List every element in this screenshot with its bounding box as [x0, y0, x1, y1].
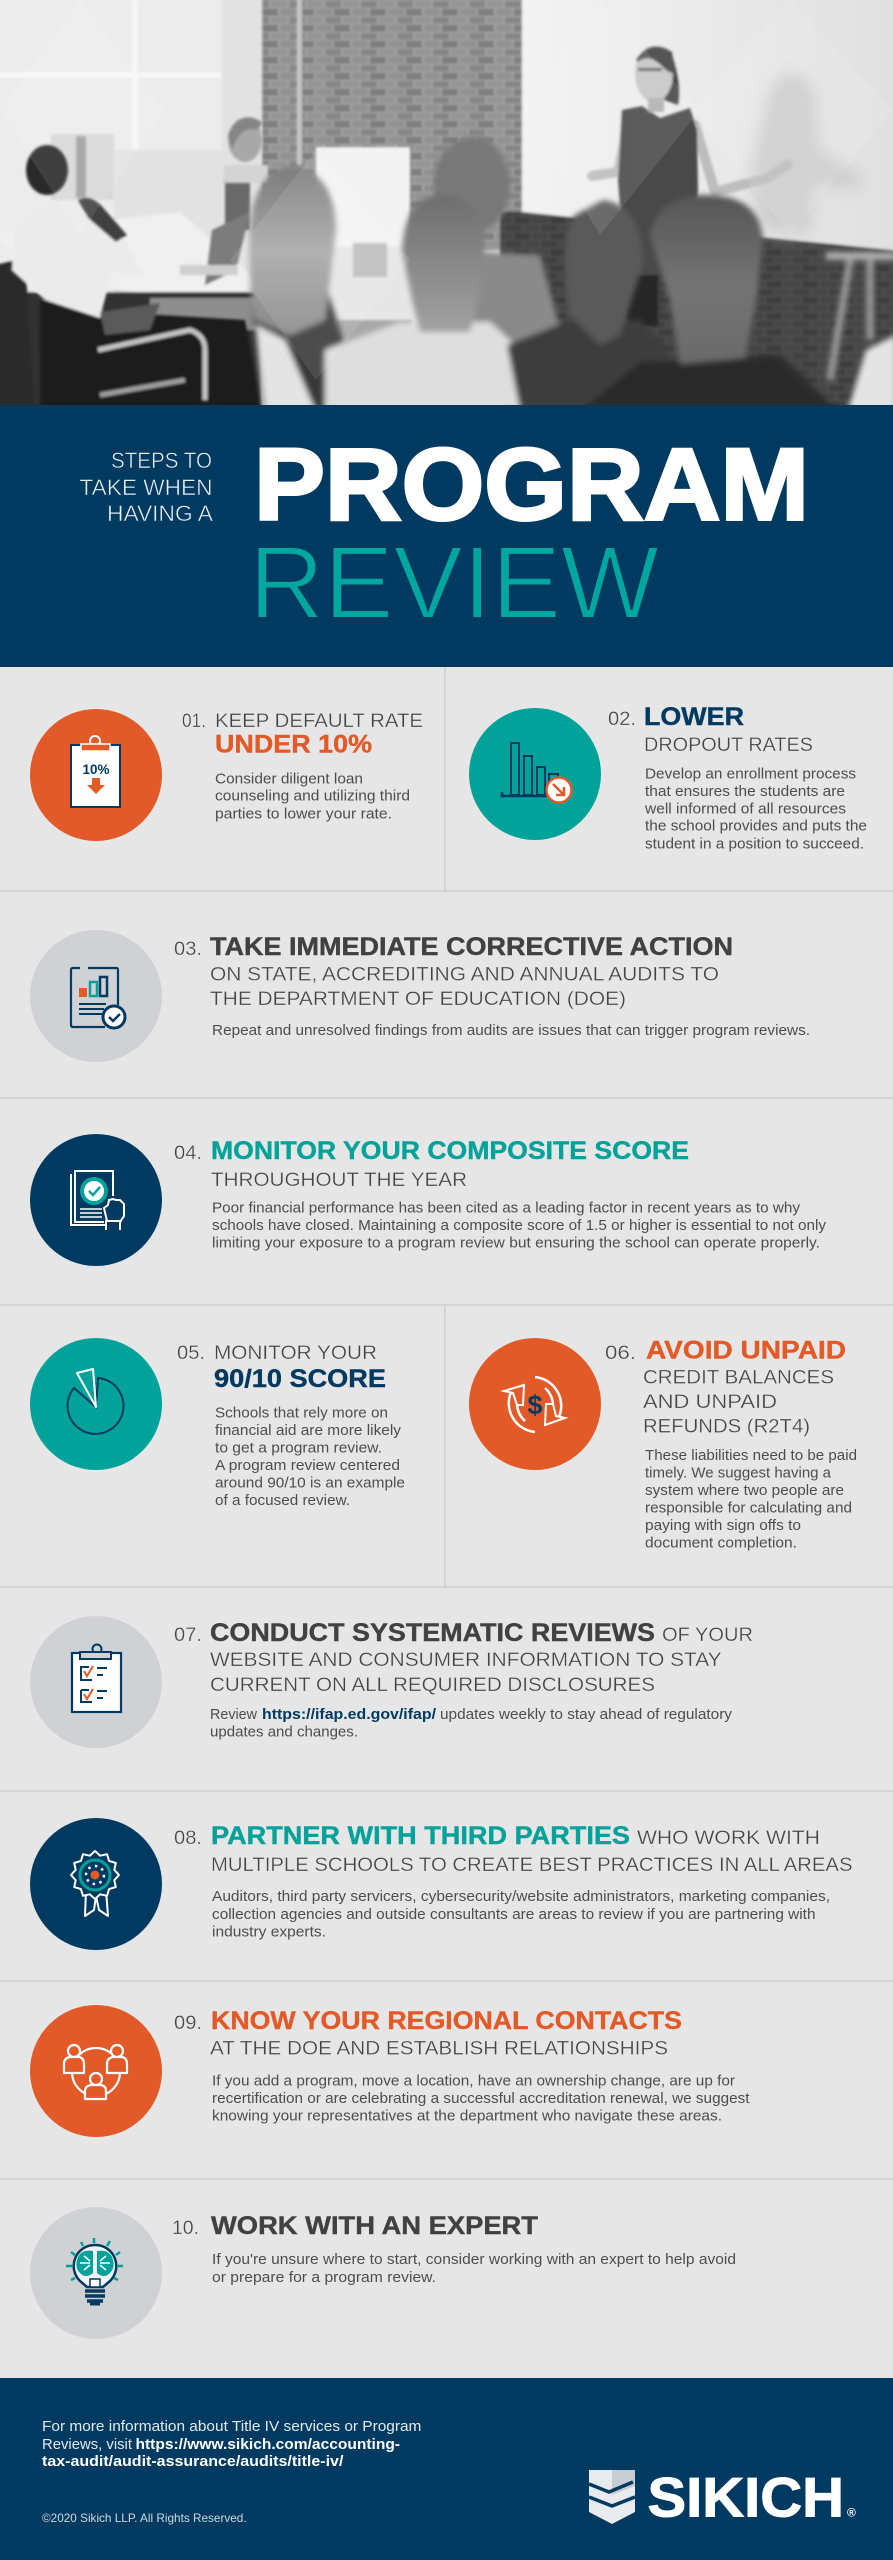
panel: step 04: MONITOR YOUR COMPOSITE SCORE [211, 1137, 689, 1165]
panel: step 08: industry experts. [212, 1924, 326, 1941]
panel: step 06: These liabilities need to be paid [645, 1447, 857, 1464]
panel: step 01 [30, 709, 423, 841]
panel: step 02 [469, 703, 867, 852]
panel: step 06: REFUNDS (R2T4) [643, 1416, 810, 1438]
panel: step 07: OF YOUR [662, 1624, 753, 1646]
panel: step 02: well informed of all resources [644, 800, 846, 817]
panel: step 04: schools have closed. Maintaining a composite score of 1.5 or higher is essential to not only [212, 1217, 826, 1234]
panel: step 10: If you're unsure where to start, consider working with an expert to help avoid [212, 2251, 736, 2268]
panel: step 05: 90/10 SCORE [214, 1365, 386, 1393]
panel: step 04: THROUGHOUT THE YEAR [211, 1169, 467, 1191]
photo: presenter and audience in a classroom [0, 0, 893, 410]
panel: step 09: KNOW YOUR REGIONAL CONTACTS [211, 2007, 682, 2035]
presenter [592, 46, 788, 326]
panel: step 08: collection agencies and outside consultants are areas to review if you are partnering with [212, 1906, 816, 1923]
intro text: STEPS TO [111, 448, 212, 473]
panel: step 02: the school provides and puts the [645, 818, 867, 835]
panel: step 10: WORK WITH AN EXPERT [211, 2212, 538, 2240]
icon: checklist clipboard [30, 1616, 162, 1748]
intro text [80, 448, 213, 526]
panel: step 07: updates and changes. [210, 1724, 358, 1741]
heading: REVIEW: REVIEW [249, 525, 659, 640]
panel: step 05: of a focused review. [215, 1492, 350, 1509]
panel: step 03 [30, 930, 810, 1062]
panel: step 05: to get a program review. [215, 1440, 382, 1457]
monitors [51, 134, 410, 285]
copyright: ©2020 Sikich LLP. All Rights Reserved. [42, 2511, 247, 2525]
footer text: more information: For more information about Title IV services or Program [42, 2418, 421, 2435]
panel: step 05: financial aid are more likely [215, 1422, 402, 1439]
footer text: more information [42, 2418, 421, 2470]
icon: award ribbon [30, 1818, 162, 1950]
panel: step 01: UNDER 10% [215, 730, 372, 758]
panel: step 04: Poor financial performance has been cited as a leading factor in recent years as to why [212, 1200, 801, 1217]
panel: step 08: WHO WORK WITH [637, 1827, 820, 1849]
panel: step 05: Schools that rely more on [215, 1405, 388, 1422]
footer text: more information: https://www.sikich.com/accounting- [136, 2436, 400, 2453]
icon: pie chart 90/10 [30, 1338, 162, 1470]
logo: Sikich: SIKICH [648, 2466, 844, 2528]
panel: step 06: CREDIT BALANCES [643, 1367, 834, 1389]
panel: step 10 [30, 2207, 736, 2339]
panel: step 06: document completion. [645, 1535, 797, 1552]
seated man at right of desk [224, 117, 268, 183]
panel: step 08 [30, 1818, 852, 1950]
footer [0, 2378, 893, 2560]
panel: step 10: 10. [172, 2217, 199, 2239]
icon: dollar with circular arrows: $ [527, 1390, 543, 1420]
seated man on the left [0, 145, 262, 410]
footer text: more information: Reviews, visit [42, 2436, 133, 2453]
dividers [0, 667, 893, 2179]
panel: step 06: AND UNPAID [643, 1391, 777, 1413]
panel: step 09: If you add a program, move a location, have an ownership change, are up for [212, 2072, 735, 2089]
panel: step 07: CONDUCT SYSTEMATIC REVIEWS [210, 1619, 655, 1647]
panel: step 07 [30, 1616, 753, 1748]
panel: step 02: 02. [608, 708, 636, 730]
intro text: HAVING A [107, 501, 213, 526]
icon: falling bar chart [469, 708, 601, 840]
panel: step 10: or prepare for a program review. [212, 2269, 436, 2286]
panel: step 07: CURRENT ON ALL REQUIRED DISCLOSURES [210, 1674, 655, 1696]
panel: step 02: Develop an enrollment process [645, 765, 856, 782]
panel: step 07: 07. [174, 1624, 202, 1646]
panel: step 09: AT THE DOE AND ESTABLISH RELATIONSHIPS [210, 2038, 668, 2060]
panel: step 03: ON STATE, ACCREDITING AND ANNUAL AUDITS TO [210, 964, 719, 986]
panel: step 02: DROPOUT RATES [644, 734, 813, 756]
light diamonds overlay [30, 50, 694, 380]
icon: connected people [30, 2005, 162, 2137]
title band [0, 405, 893, 667]
panel: step 06: system where two people are [645, 1482, 844, 1499]
panel: step 01: 01. [182, 710, 206, 732]
panel: step 02: that ensures the students are [645, 783, 845, 800]
panel: step 04 [30, 1134, 826, 1266]
panel: step 09: knowing your representatives at the department who navigate these areas. [212, 2108, 722, 2125]
panel: step 05: around 90/10 is an example [215, 1475, 405, 1492]
panel: step 01: parties to lower your rate. [215, 805, 392, 822]
panel: step 01: Consider diligent loan [215, 770, 363, 787]
panel: step 09: 09. [174, 2012, 202, 2034]
panel: step 06 [469, 1337, 857, 1552]
panel: step 01: counseling and utilizing third [215, 788, 410, 805]
panel: step 08: 08. [174, 1827, 202, 1849]
icon: light bulb with brain [30, 2207, 162, 2339]
panel: step 08: MULTIPLE SCHOOLS TO CREATE BEST PRACTICES IN ALL AREAS [211, 1854, 852, 1876]
panel: step 08: PARTNER WITH THIRD PARTIES [211, 1822, 630, 1850]
panel: step 05: A program review centered [215, 1457, 400, 1474]
panel: step 01: KEEP DEFAULT RATE [215, 710, 423, 732]
heading: PROGRAM: PROGRAM [254, 428, 809, 542]
panel: step 03: Repeat and unresolved findings from audits are issues that can trigger program reviews. [212, 1022, 810, 1039]
footer text: more information: tax-audit/audit-assurance/audits/title-iv/ [42, 2453, 344, 2470]
panel: step 09: recertification or are celebrating a successful accreditation renewal, we suggest [212, 2090, 750, 2107]
panel: step 05: MONITOR YOUR [214, 1342, 377, 1364]
panel: step 05 [30, 1338, 405, 1509]
panel: step 06: paying with sign offs to [645, 1517, 801, 1534]
icon: report with check [30, 930, 162, 1062]
panel: step 07: Review [210, 1706, 257, 1723]
panel: step 03: TAKE IMMEDIATE CORRECTIVE ACTION [210, 933, 733, 961]
audience from behind [249, 137, 893, 410]
icon: document with hand [30, 1134, 162, 1266]
panel: step 06: AVOID UNPAID [646, 1337, 846, 1365]
panel: step 06: timely. We suggest having a [645, 1465, 832, 1482]
panel: step 04: limiting your exposure to a program review but ensuring the school can operate properly. [212, 1235, 820, 1252]
panel: step 04: 04. [174, 1142, 202, 1164]
panel: step 05: 05. [177, 1342, 205, 1364]
panel: step 02: LOWER [644, 703, 744, 731]
panel: step 06: responsible for calculating and [645, 1500, 852, 1517]
icon: dollar with circular arrows [469, 1338, 601, 1470]
panel: step 07: WEBSITE AND CONSUMER INFORMATION TO STAY [210, 1649, 722, 1671]
panel: step 02: student in a position to succeed. [645, 835, 864, 852]
icon: clipboard 10%: 10% [82, 762, 110, 777]
panel: step 07: updates weekly to stay ahead of regulatory [440, 1706, 732, 1723]
panel: step 03: THE DEPARTMENT OF EDUCATION (DOE) [210, 988, 626, 1010]
panel: step 08: Auditors, third party servicers, cybersecurity/website administrators, marketing companies, [212, 1888, 830, 1905]
logo: Sikich: ® [847, 2506, 856, 2520]
panel: step 06: 06. [605, 1342, 636, 1364]
intro text: TAKE WHEN [80, 475, 212, 500]
panel: step 07: https://ifap.ed.gov/ifap/ [262, 1706, 437, 1723]
icon: clipboard 10% [30, 709, 162, 841]
panel: step 03: 03. [174, 938, 202, 960]
panel: step 09 [30, 2005, 750, 2137]
